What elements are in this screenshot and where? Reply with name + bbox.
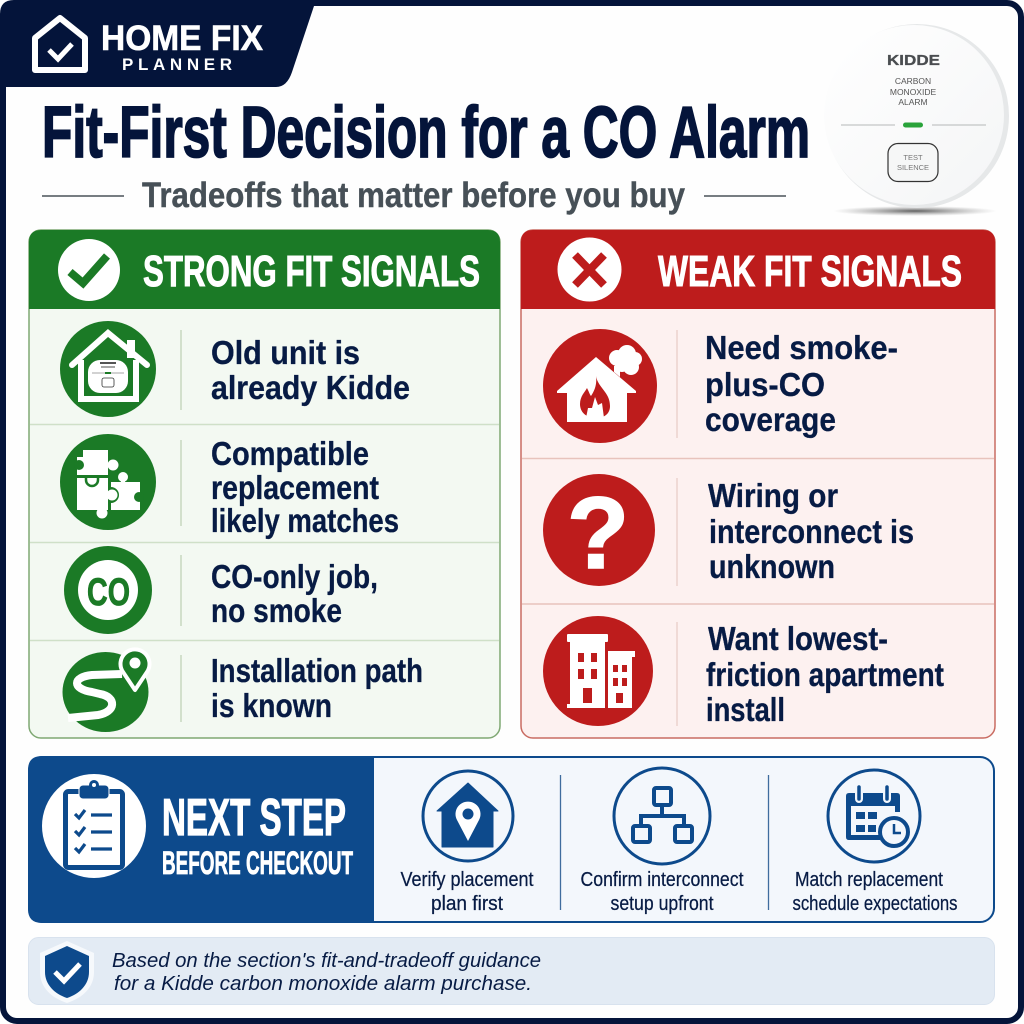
step: confirm interconnect: setup upfront [610,893,714,915]
panel header: strong fit signals: STRONG FIT SIGNALS [143,247,480,296]
logo wordmark: PLANNER [122,55,232,74]
footer text: Based on the section's fit-and-tradeoff guidance [112,950,541,972]
next step label block [28,756,374,923]
text: apartment install [706,620,944,728]
product image: Kidde CO alarm: ALARM [898,97,928,107]
icon: route with pin [62,649,150,732]
text: CO-only job: no smoke [211,592,342,629]
text: wiring unknown: interconnect is [709,513,914,550]
footer text: for a Kidde carbon monoxide alarm purchase. [114,973,532,995]
text: smoke-plus-CO: Need smoke- [705,329,898,366]
logo wordmark [101,19,264,74]
text: CO-only job: CO-only job, [211,558,378,595]
text: compatible replacement: Compatible [211,435,369,472]
text: compatible replacement: likely matches [211,502,399,539]
logo wordmark: HOME FIX [101,19,264,58]
text: smoke-plus-CO: plus-CO [705,366,825,403]
product image: Kidde CO alarm: KIDDE [887,52,940,69]
text: apartment install: friction apartment [706,656,944,693]
icon: apartment building [543,616,653,726]
logo badge [0,0,316,87]
icon: clipboard checklist [42,774,146,878]
text: compatible replacement [211,435,399,539]
step: verify placement: Verify placement [400,869,534,891]
footer text [112,950,541,995]
product image: Kidde CO alarm: SILENCE [897,163,929,172]
text: CO-only job [211,558,378,629]
icon: CO badge [64,546,152,634]
text: installation path: is known [211,687,332,724]
subtitle: Tradeoffs that matter before you buy [142,176,685,215]
icon: shield check [40,941,94,1003]
text: installation path [211,652,423,724]
next step heading: BEFORE CHECKOUT [162,845,353,881]
step: confirm interconnect [580,768,744,915]
next step heading: NEXT STEP [162,789,346,847]
icon: puzzle pieces [60,434,156,530]
text: smoke-plus-CO [705,329,898,438]
text: wiring unknown: Wiring or [708,477,838,514]
icon: CO badge: CO [87,571,130,614]
step: verify placement: plan first [431,893,503,915]
product image: Kidde CO alarm: CARBON [895,76,931,86]
text: compatible replacement: replacement [211,469,379,506]
product image: Kidde CO alarm: MONOXIDE [890,87,936,97]
panel header: weak fit signals [521,230,995,309]
step: match schedule: Match replacement [795,869,943,891]
product image: Kidde CO alarm: TEST [903,153,923,162]
text: installation path: Installation path [211,652,423,689]
product image: Kidde CO alarm [824,24,1009,216]
icon: question mark [543,474,655,590]
panel: strong fit signals [29,230,500,738]
icon: question mark: ? [567,476,629,590]
icon: house with check [35,18,85,70]
step: verify placement [400,771,534,915]
text: smoke-plus-CO: coverage [705,401,836,438]
step: match schedule: schedule expectations [792,893,958,915]
text: apartment install: install [706,691,785,728]
next step heading [162,789,353,881]
panel header: strong fit signals [29,230,500,309]
icon: house on fire [543,329,657,443]
panel: next step [28,756,994,923]
text: old unit [211,334,410,406]
step: match schedule [792,770,958,915]
text: old unit: already Kidde [211,369,410,406]
text: apartment install: Want lowest- [708,620,888,657]
panel: weak fit signals [521,230,995,738]
icon: house with alarm [60,321,156,417]
text: wiring unknown [708,477,914,585]
text: old unit: Old unit is [211,334,360,371]
step: confirm interconnect: Confirm interconnect [580,869,744,891]
footer note [28,938,994,1004]
text: wiring unknown: unknown [709,548,835,585]
